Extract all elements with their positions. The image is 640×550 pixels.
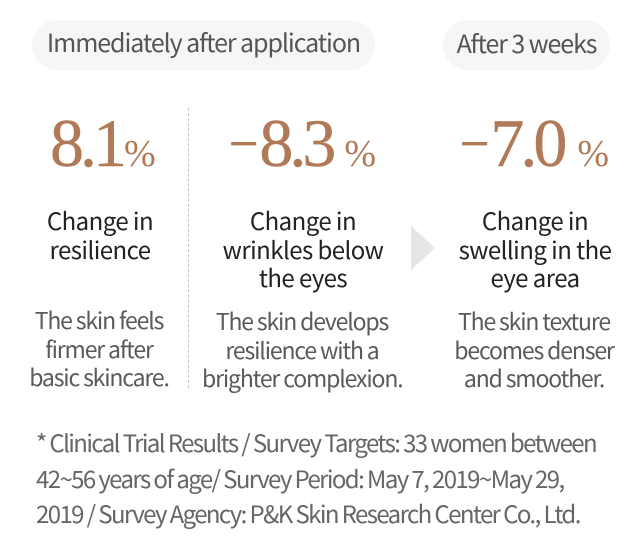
pill heading: immediately after application bbox=[32, 20, 375, 70]
description: firmer skin: firmer after bbox=[45, 330, 153, 364]
footnote bbox=[36, 424, 596, 530]
description: denser texture: The skin texture bbox=[458, 303, 610, 337]
description: resilience and brightness bbox=[202, 303, 402, 394]
stat: 8.1%: 8.1% bbox=[50, 105, 156, 181]
heading: change in swelling: eye area bbox=[490, 259, 580, 294]
description: resilience and brightness: brighter complexion. bbox=[202, 360, 402, 394]
dashed divider bbox=[188, 108, 189, 388]
icon: arrow bbox=[411, 226, 435, 270]
footnote: 2019 / Survey Agency: P&K Skin Research Center Co., Ltd. bbox=[36, 495, 580, 530]
description: firmer skin: basic skincare. bbox=[29, 359, 169, 393]
description: denser texture: and smoother. bbox=[464, 360, 604, 394]
footnote: * Clinical Trial Results / Survey Targets: 33 women between bbox=[36, 424, 596, 459]
pill heading: after 3 weeks: After 3 weeks bbox=[457, 25, 596, 61]
description: resilience and brightness: The skin develops bbox=[216, 303, 388, 337]
description: firmer skin bbox=[29, 302, 169, 393]
heading: change in wrinkles: the eyes bbox=[259, 259, 347, 294]
heading: change in resilience bbox=[47, 202, 153, 266]
pill heading: immediately after application: Immediately after application bbox=[47, 24, 360, 60]
stat: -8.3%: −8.3 % bbox=[229, 105, 376, 181]
description: firmer skin: The skin feels bbox=[35, 302, 163, 336]
description: resilience and brightness: resilience with a bbox=[225, 332, 379, 366]
heading: change in swelling: Change in bbox=[482, 202, 588, 237]
heading: change in swelling: swelling in the bbox=[459, 231, 611, 266]
pill heading: after 3 weeks bbox=[443, 20, 610, 70]
stat: -7.0%: −7.0 % bbox=[460, 105, 609, 181]
heading: change in swelling bbox=[459, 202, 611, 294]
description: denser texture bbox=[454, 303, 615, 394]
description: denser texture: becomes denser bbox=[454, 332, 614, 366]
footnote: 42~56 years of age/ Survey Period: May 7, 2019~May 29, bbox=[36, 460, 564, 494]
heading: change in wrinkles bbox=[223, 202, 384, 294]
heading: change in wrinkles: wrinkles below bbox=[223, 231, 383, 266]
heading: change in resilience: Change in bbox=[47, 202, 153, 237]
heading: change in resilience: resilience bbox=[50, 231, 150, 266]
heading: change in wrinkles: Change in bbox=[250, 202, 356, 237]
